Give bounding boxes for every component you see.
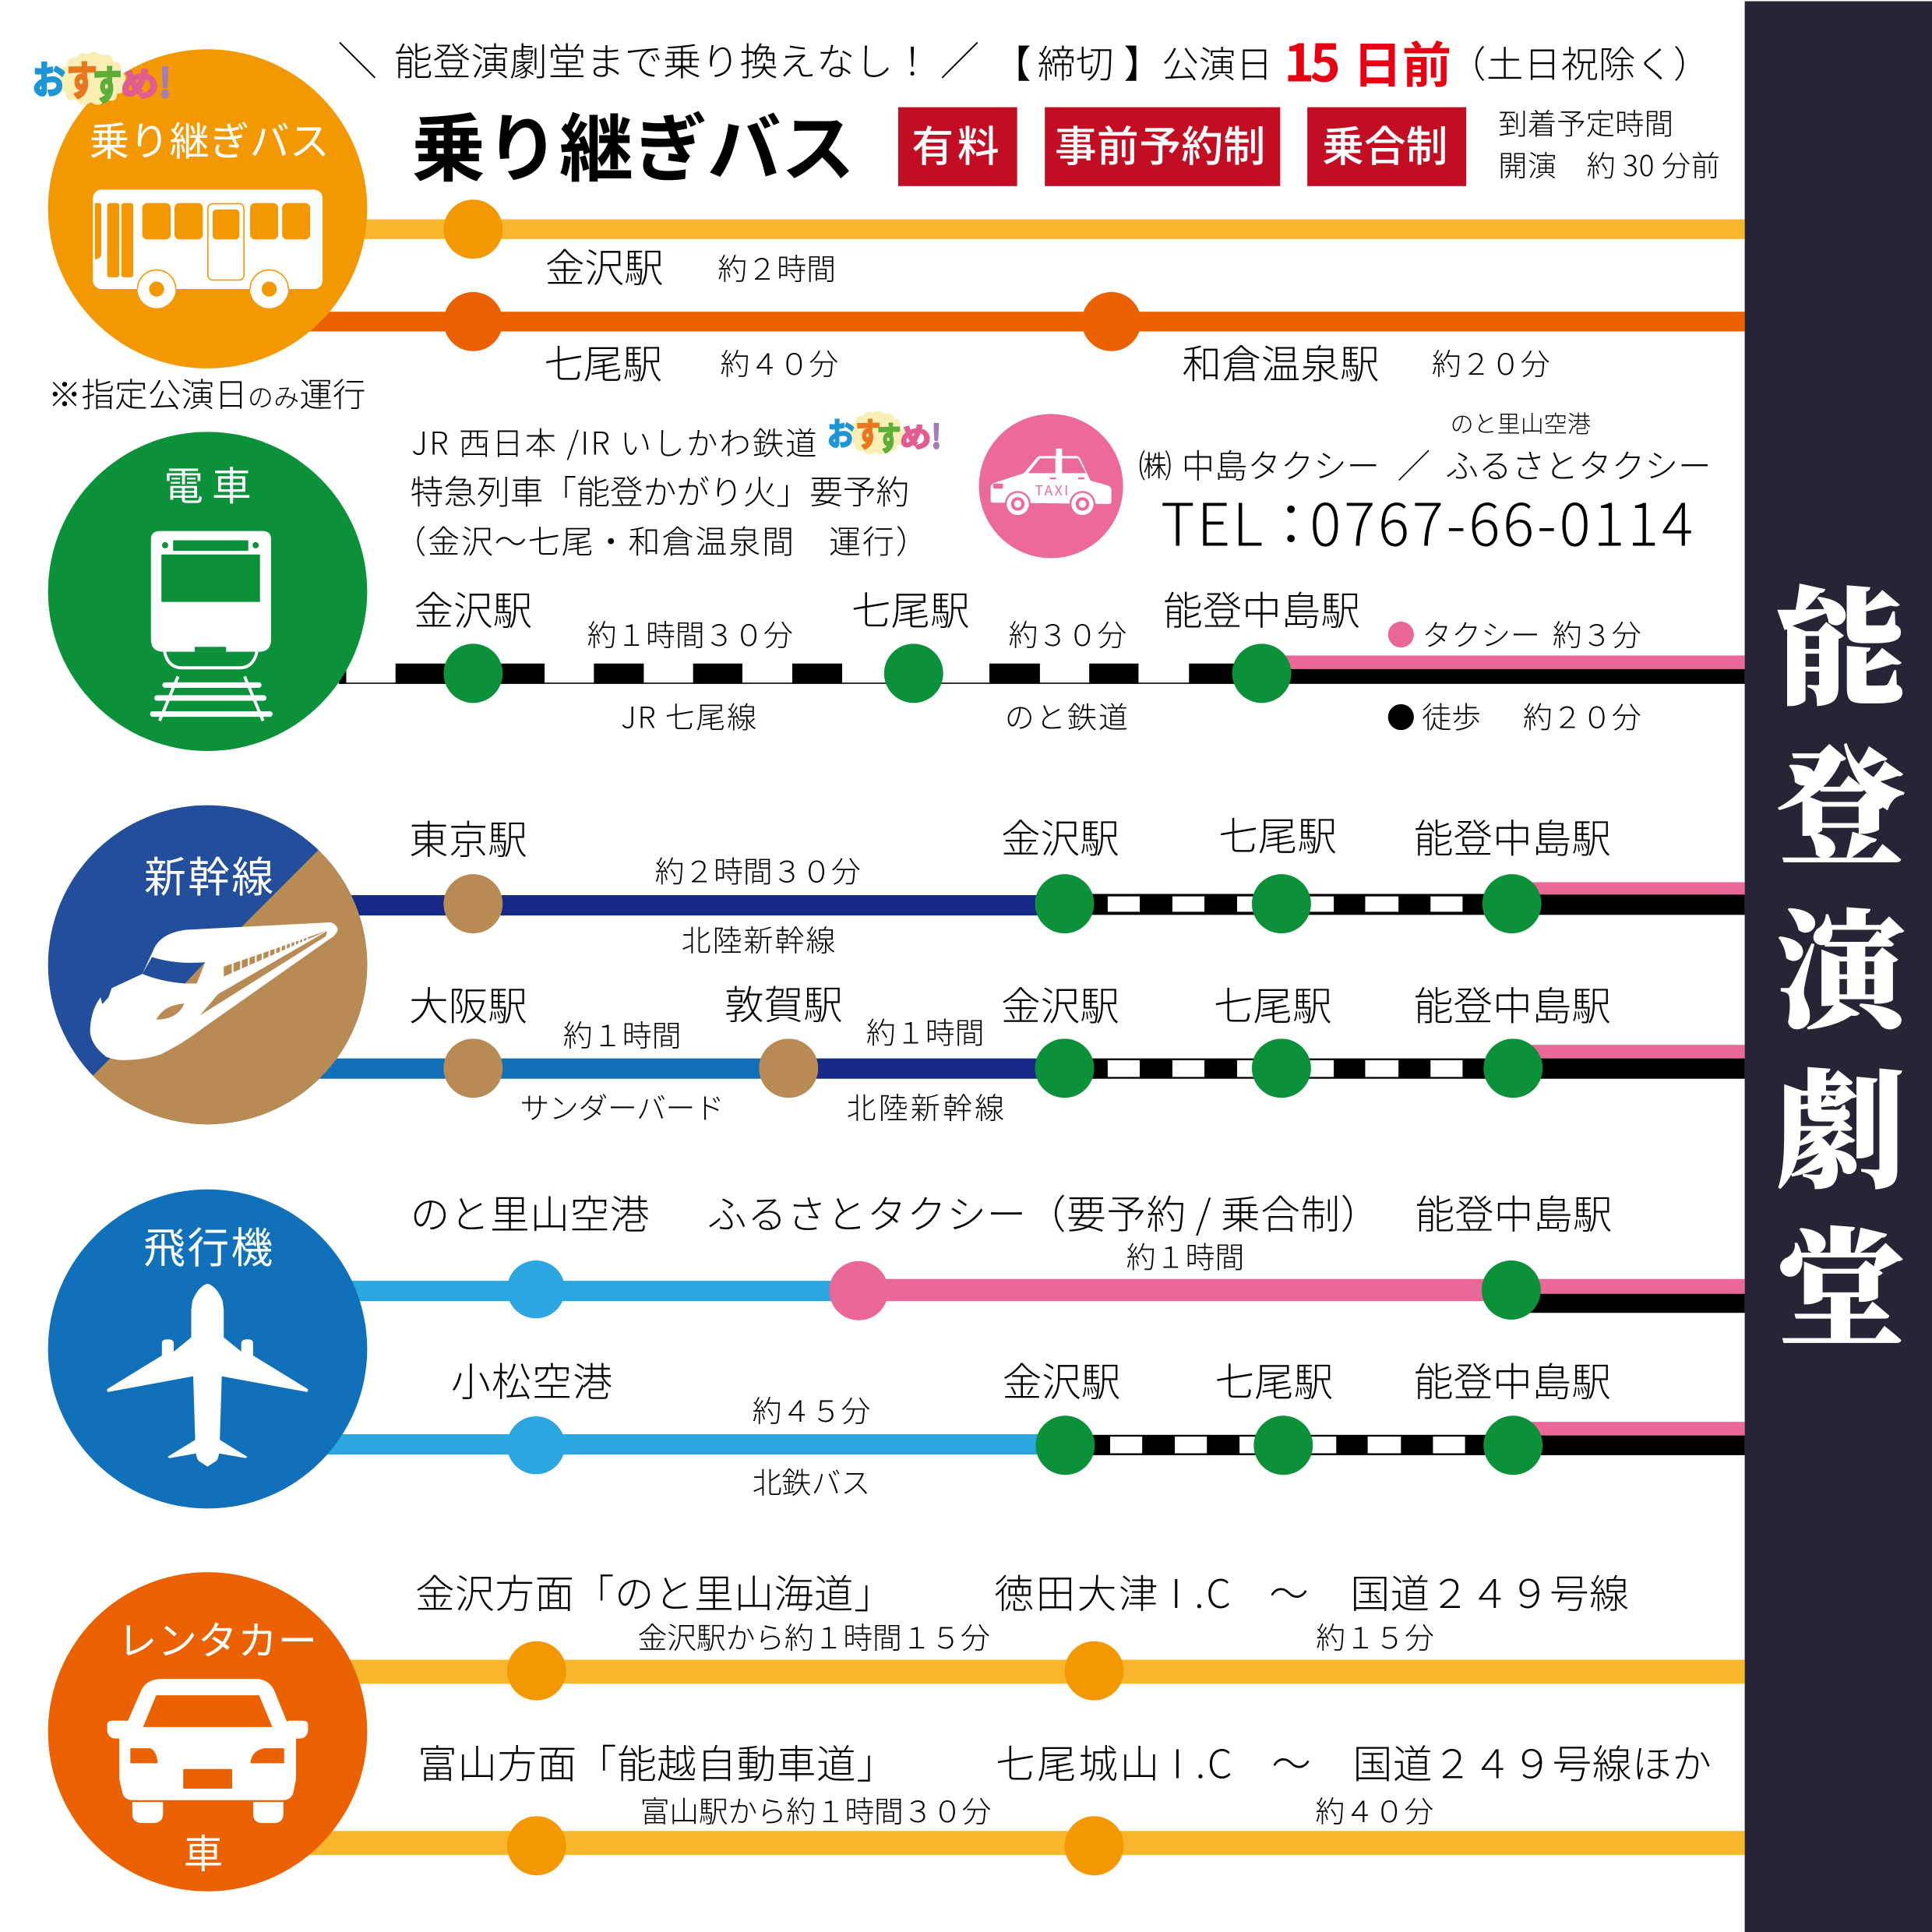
taxi company names: 中島タクシー <box>1182 441 1380 488</box>
route line: Tokyo: 東京駅 <box>409 808 527 866</box>
legend: walk: 徒歩 <box>1422 694 1481 737</box>
legend: taxi: タクシー <box>1422 612 1540 654</box>
route line: Noto airport: ふるさとタクシー（要予約 / 乗合制） <box>707 1183 1380 1240</box>
deadline notice: 締切 <box>1038 34 1114 90</box>
arrival time note <box>1498 100 1720 185</box>
icon: train <box>151 531 271 721</box>
route line: Nanao and Wakura bus: 約４０分 <box>720 340 838 383</box>
route line: Kanazawa bus: 金沢駅 <box>545 236 664 294</box>
legend: walk <box>1388 694 1641 737</box>
title banner: 能登演劇堂: 演 <box>1777 870 1927 1054</box>
badge: reservation: 事前予約制 <box>1055 114 1265 174</box>
badge: shared ride <box>1307 108 1466 186</box>
circle: bus <box>48 49 367 368</box>
icon: bus <box>93 189 323 308</box>
route line: Osaka: 約１時間 <box>563 1012 682 1055</box>
route line: Komatsu airport: 能登中島駅 <box>1414 1350 1611 1408</box>
recommended sticker: め <box>121 58 159 106</box>
route line: rail <box>339 579 1745 737</box>
route line: Osaka: 北陸新幹線 <box>847 1084 1004 1127</box>
route line: rail: 約３０分 <box>1009 612 1126 654</box>
circle: shinkansen: 新幹線 <box>144 844 273 904</box>
deadline notice <box>993 22 1710 97</box>
badge: shared ride: 乗合制 <box>1322 114 1447 174</box>
badge: reservation <box>1045 108 1280 186</box>
circle: train: 電 車 <box>164 454 252 512</box>
route line: Nanao and Wakura bus: 約２０分 <box>1432 340 1550 383</box>
taxi company names <box>1138 405 1712 488</box>
route line: Noto airport: 約１時間 <box>1126 1234 1244 1277</box>
title banner: 能登演劇堂: 登 <box>1777 707 1905 891</box>
taxi phone: ： <box>1262 478 1320 563</box>
title banner: 能登演劇堂: 能 <box>1777 547 1905 731</box>
icon: bullet train <box>90 922 338 1060</box>
route line: Nanao and Wakura bus: 和倉温泉駅 <box>1183 333 1380 390</box>
route line: rail: 約１時間３０分 <box>587 612 793 654</box>
train description: JR 西日本 /IR いしかわ鉄道 <box>411 418 817 464</box>
deadline notice: 【 <box>993 34 1031 90</box>
deadline notice: 】 <box>1123 34 1162 90</box>
icon: taxi <box>979 414 1123 558</box>
train description <box>394 418 928 562</box>
circle: shinkansen <box>48 806 369 1146</box>
circle: airplane: 飛行機 <box>143 1215 273 1275</box>
route line: Osaka: 能登中島駅 <box>1414 975 1611 1032</box>
route line: Noetsu Expressway: 約４０分 <box>1315 1788 1433 1831</box>
train description: 特急列車「能登かがり火」要予約 <box>411 466 909 514</box>
taxi contact <box>979 405 1712 563</box>
route line: Tokyo: 七尾駅 <box>1218 804 1337 862</box>
route line: Noetsu Expressway: 富山駅から約１時間３０分 <box>640 1788 991 1831</box>
circle: car: レンタカー <box>118 1609 317 1666</box>
route section: connecting bus <box>32 22 1745 417</box>
route line: Komatsu airport: 小松空港 <box>451 1350 612 1408</box>
icon: airplane <box>107 1284 308 1467</box>
recommended sticker <box>32 48 171 112</box>
recommended sticker: す <box>66 48 97 108</box>
badge: paid <box>898 108 1017 186</box>
icon: car <box>108 1679 308 1823</box>
route line: Noto Satoyama Kaido: 金沢駅から約１時間１５分 <box>637 1614 990 1657</box>
route section: rental car <box>48 1562 1745 1891</box>
route line: Tokyo <box>345 804 1745 960</box>
note: designated days: ※指定公演日のみ運行 <box>48 368 366 417</box>
route line: Tokyo: 能登中島駅 <box>1414 806 1611 864</box>
legend: taxi <box>1388 612 1641 654</box>
arrival time note: 到着予定時間 <box>1498 100 1673 143</box>
deadline notice: 公演日 <box>1162 35 1273 89</box>
taxi phone: 0767-66-0114 <box>1310 478 1693 563</box>
route line: rail: のと鉄道 <box>1005 694 1128 737</box>
route line: Komatsu airport: 北鉄バス <box>753 1459 870 1502</box>
route line: Noetsu Expressway <box>302 1732 1745 1875</box>
route line: Noto Satoyama Kaido: 徳田大津 I .C <box>994 1562 1231 1620</box>
header slogan: 能登演劇堂まで乗り換えなし！ <box>394 31 932 86</box>
route line: Nanao and Wakura bus <box>308 292 1745 390</box>
route line: Tokyo: 金沢駅 <box>1001 806 1119 864</box>
taxi company names: のと里山空港 <box>1451 405 1591 439</box>
icon: taxi: TAXI <box>1035 481 1068 500</box>
taxi company names: ㈱ <box>1138 440 1172 488</box>
route line: Kanazawa bus <box>351 199 1745 294</box>
circle: bus: 乗り継ぎバス <box>90 108 330 167</box>
route line: Noetsu Expressway: ～ <box>1271 1732 1311 1789</box>
route line: Noto airport: のと里山空港 <box>411 1183 650 1240</box>
taxi company names: ふるさとタクシー <box>1445 440 1712 488</box>
title banner: 能登演劇堂: 劇 <box>1777 1030 1905 1214</box>
recommended sticker: す <box>855 408 881 457</box>
circle: train <box>48 432 367 751</box>
badge: paid: 有料 <box>911 114 999 174</box>
route line: Kanazawa bus: 約２時間 <box>717 245 836 288</box>
route line: rail: JR 七尾線 <box>621 694 756 737</box>
route line: Komatsu airport <box>320 1350 1745 1502</box>
heading: bus: 乗り継ぎバス <box>411 90 855 197</box>
route line: Noto Satoyama Kaido: ～ <box>1269 1562 1309 1620</box>
route line: Osaka: 七尾駅 <box>1214 975 1332 1032</box>
route line: Komatsu airport: 七尾駅 <box>1215 1350 1333 1408</box>
route line: Noetsu Expressway: 国道２４９号線ほか <box>1353 1732 1712 1789</box>
route line: Komatsu airport: 約４５分 <box>753 1387 870 1430</box>
recommended sticker: め <box>900 416 931 456</box>
circle: car: 車 <box>184 1822 223 1880</box>
deadline notice: （土日祝除く） <box>1449 35 1710 89</box>
route line: Tokyo: 約２時間３０分 <box>655 848 861 890</box>
route line: Noto Satoyama Kaido <box>345 1562 1745 1701</box>
recommended sticker: お <box>32 50 65 105</box>
route line: Noto airport: 能登中島駅 <box>1416 1183 1613 1240</box>
train description: （金沢～七尾・和倉温泉間 運行） <box>394 516 928 562</box>
route line: Komatsu airport: 金沢駅 <box>1003 1350 1120 1408</box>
route line: Noetsu Expressway: 七尾城山 I .C <box>996 1732 1232 1789</box>
route line: Nanao and Wakura bus: 七尾駅 <box>544 333 662 390</box>
arrival time note: 開演 約 30 分前 <box>1498 143 1720 185</box>
route line: Tokyo: 北陸新幹線 <box>682 917 835 960</box>
route line: rail: 七尾駅 <box>851 579 970 636</box>
route line: Noetsu Expressway: 富山方面「能越自動車道」 <box>418 1732 896 1789</box>
recommended sticker <box>827 408 941 460</box>
route line: Osaka: 約１時間 <box>866 1010 985 1052</box>
route line: Noto airport <box>351 1183 1745 1320</box>
recommended sticker: す <box>876 412 901 460</box>
route line: Noto Satoyama Kaido: 金沢方面「のと里山海道」 <box>415 1562 894 1620</box>
route line: Osaka: 大阪駅 <box>409 975 527 1032</box>
taxi phone: TEL <box>1161 478 1263 563</box>
legend: walk: 約２０分 <box>1523 694 1641 737</box>
title banner: 能登演劇堂: 堂 <box>1777 1189 1905 1373</box>
deadline notice: 日前 <box>1353 26 1451 97</box>
route section: shinkansen <box>48 804 1745 1146</box>
route section: train <box>48 405 1745 751</box>
title banner: 能登演劇堂 <box>1745 2 1932 1932</box>
recommended sticker: お <box>827 408 855 454</box>
circle: airplane <box>48 1190 367 1508</box>
route section: airplane <box>48 1183 1745 1508</box>
recommended sticker: ! <box>931 411 941 457</box>
deadline notice: 15 <box>1284 22 1341 97</box>
legend: taxi: 約３分 <box>1553 612 1641 654</box>
route line: Osaka <box>308 973 1745 1127</box>
route line: Osaka: 敦賀駅 <box>724 973 843 1031</box>
taxi company names: ／ <box>1398 440 1430 488</box>
recommended sticker: す <box>93 53 122 112</box>
header slogan: ／ <box>940 29 979 86</box>
route line: Osaka: 金沢駅 <box>1001 975 1119 1032</box>
route line: Osaka: サンダーバード <box>520 1084 724 1127</box>
header slogan: ＼ <box>337 29 377 86</box>
route line: Noto Satoyama Kaido: 約１５分 <box>1316 1614 1434 1657</box>
circle: car <box>48 1572 367 1891</box>
route line: rail: 能登中島駅 <box>1163 579 1360 636</box>
recommended sticker: ! <box>159 51 171 109</box>
route line: Noto Satoyama Kaido: 国道２４９号線 <box>1350 1562 1629 1620</box>
route line: rail: 金沢駅 <box>414 579 532 636</box>
